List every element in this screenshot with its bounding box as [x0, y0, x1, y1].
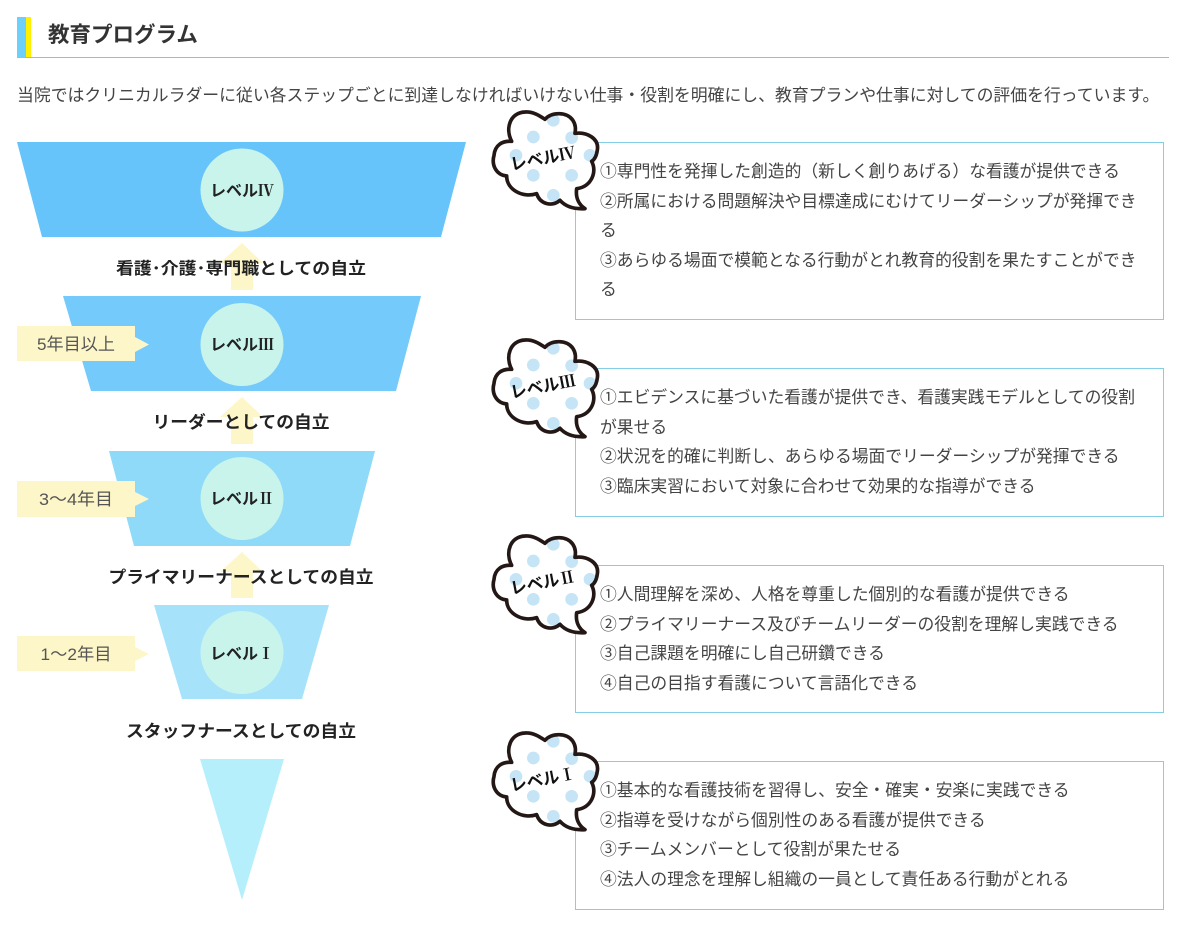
bubble: レベルⅣ: レベルⅣ [508, 139, 578, 175]
panel: level 3 description [575, 368, 1164, 517]
bubble: レベルⅢ: レベルⅢ [508, 367, 577, 403]
text: level 1 items: ④法人の理念を理解し組織の一員として責任ある行動がとれる [600, 870, 1069, 888]
heading: 教育プログラム [17, 17, 1169, 58]
label: プライマリーナースとしての自立: プライマリーナースとしての自立 [108, 567, 374, 587]
panel: level 4 description [575, 142, 1164, 320]
text: level 1 items [600, 781, 1070, 888]
heading: 教育プログラム: 教育プログラム [48, 23, 198, 47]
text: level 1 items: ③チームメンバーとして役割が果たせる [600, 840, 901, 859]
circle: レベルⅠ: レベルⅠ [210, 641, 274, 664]
intro text: 当院ではクリニカルラダーに従い各ステップごとに到達しなければいけない仕事・役割を明確にし、教育プランや仕事に対しての評価を行っています。 [17, 86, 1159, 105]
funnel: bottom triangle [200, 759, 284, 900]
text: level 4 items: る [600, 221, 617, 240]
text: level 3 items: ①エビデンスに基づいた看護が提供でき、看護実践モデルとしての役割 [600, 388, 1135, 407]
label: リーダーとしての自立: リーダーとしての自立 [152, 412, 330, 432]
label: スタッフナースとしての自立: スタッフナースとしての自立 [126, 721, 356, 741]
bubble: レベルⅣ [493, 112, 598, 209]
text: level 2 items [600, 585, 1119, 692]
funnel: level 2 band [109, 451, 375, 546]
circle: レベルⅡ [200, 457, 284, 540]
tag: 3～4年目 [17, 481, 149, 517]
tag: 1～2年目 [17, 636, 149, 671]
panel: level 2 description [575, 565, 1164, 713]
bubble: レベルⅠ [493, 733, 598, 830]
tag: 5年目以上 [17, 326, 149, 361]
arrow: level 1 to level 2 [220, 552, 263, 598]
panel: level 1 description [575, 761, 1164, 910]
text: level 4 items: ①専門性を発揮した創造的（新しく創りあげる）な看護が提供できる [600, 162, 1120, 181]
tag: 5年目以上: 5年目以上 [37, 335, 115, 354]
tag: 3～4年目: 3～4年目 [39, 490, 113, 509]
text: level 4 items [600, 162, 1137, 299]
label: 看護・介護・専門職としての自立: 看護･介護･専門職としての自立 [116, 258, 366, 278]
text: level 3 items [600, 388, 1135, 496]
text: level 4 items: ②所属における問題解決や目標達成にむけてリーダーシップが発揮でき [600, 192, 1137, 210]
text: level 4 items: ③あらゆる場面で模範となる行動がとれ教育的役割を果たすことができ [600, 250, 1136, 270]
circle: レベルⅣ [200, 148, 284, 232]
funnel: level 1 band [154, 605, 329, 699]
text: level 2 items: ②プライマリーナース及びチームリーダーの役割を理解し実践できる [600, 614, 1119, 634]
text: level 1 items: ②指導を受けながら個別性のある看護が提供できる [600, 810, 986, 830]
tag: 1～2年目: 1～2年目 [40, 645, 112, 664]
circle: レベルⅢ: レベルⅢ [210, 332, 274, 355]
circle: レベルⅡ: レベルⅡ [210, 486, 274, 509]
bubble: レベルⅢ [493, 340, 598, 437]
bubble: レベルⅡ [493, 536, 598, 633]
funnel: level 4 band [17, 142, 466, 237]
text: level 2 items: ③自己課題を明確にし自己研鑽できる [600, 644, 885, 663]
text: level 2 items: ①人間理解を深め、人格を尊重した個別的な看護が提供できる [600, 585, 1070, 604]
funnel: level 3 band [63, 296, 421, 391]
text: level 3 items: が果せる [600, 418, 667, 436]
text: level 3 items: ②状況を的確に判断し、あらゆる場面でリーダーシップが発揮できる [600, 447, 1120, 466]
text: level 1 items: ①基本的な看護技術を習得し、安全・確実・安楽に実践できる [600, 781, 1070, 800]
text: level 4 items: る [600, 280, 617, 299]
circle: レベルⅠ [200, 611, 284, 694]
arrow: level 3 to level 4 [220, 243, 263, 290]
text: level 3 items: ③臨床実習において対象に合わせて効果的な指導ができる [600, 476, 1035, 496]
circle: レベルⅣ: レベルⅣ [210, 178, 274, 201]
bubble: レベルⅡ: レベルⅡ [508, 563, 577, 599]
text: level 2 items: ④自己の目指す看護について言語化できる [600, 674, 918, 692]
arrow: level 2 to level 3 [220, 397, 263, 444]
circle: レベルⅢ [200, 303, 284, 386]
bubble: レベルⅠ: レベルⅠ [508, 760, 577, 796]
